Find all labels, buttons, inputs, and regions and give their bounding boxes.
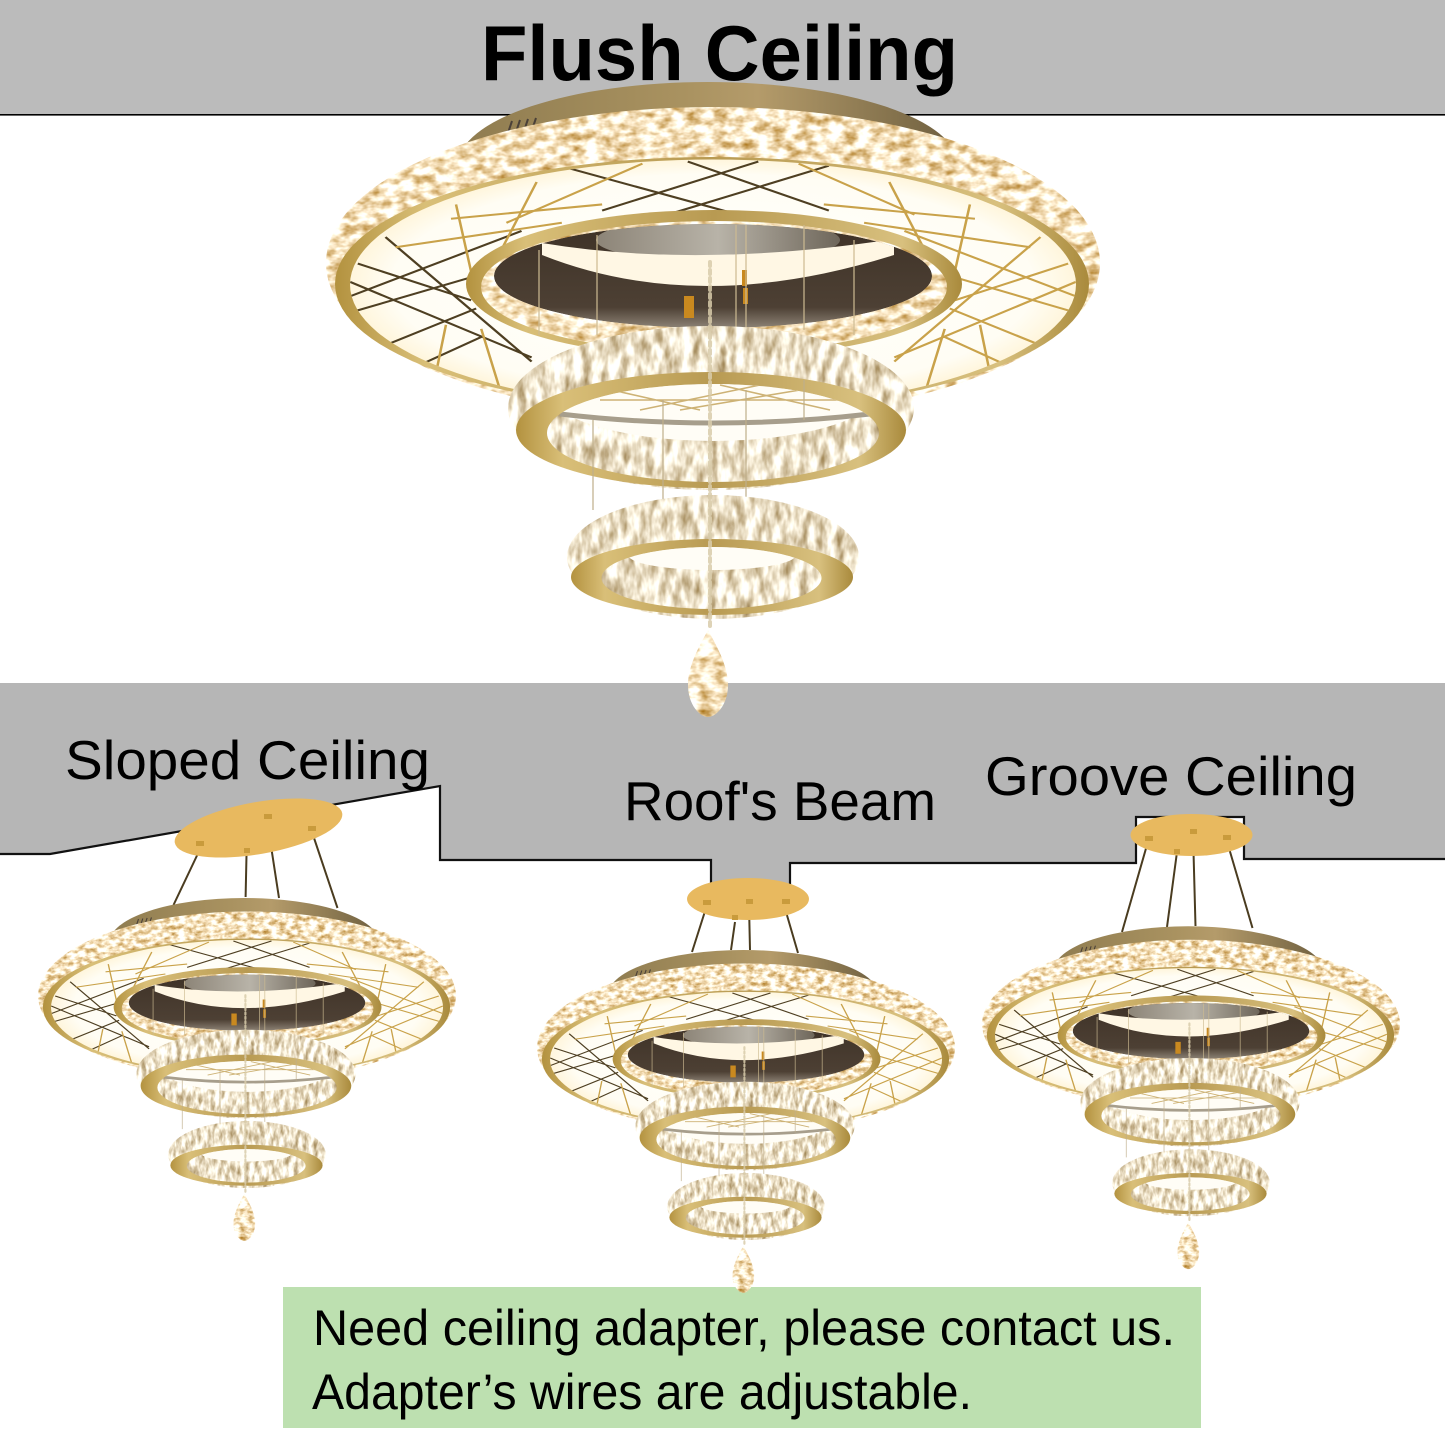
groove canopy screws <box>1145 829 1231 854</box>
dome vent slots <box>508 118 536 133</box>
second ring crystal band <box>481 221 947 353</box>
third ring gold rim <box>516 372 906 488</box>
third ring crystal band <box>508 326 914 490</box>
beam canopy wires <box>692 905 798 953</box>
sloped canopy plate <box>170 788 347 868</box>
flush ceiling band <box>0 0 1445 116</box>
mirror disc <box>596 218 840 262</box>
crystal pendant drop <box>688 630 728 717</box>
fourth ring inner crystal <box>602 547 822 609</box>
lower wires <box>593 380 804 510</box>
large ring opening <box>350 160 1076 410</box>
beam canopy screws <box>703 899 790 920</box>
groove pendant lamp <box>982 926 1400 1269</box>
roof's beam label: Roof's Beam <box>624 770 936 832</box>
groove ceiling chandelier <box>982 814 1400 1269</box>
adapter note line 2: Adapter’s wires are adjustable. <box>312 1364 972 1420</box>
large ring crystal band <box>326 107 1100 419</box>
sloped ceiling chandelier <box>38 788 456 1241</box>
beam pendant lamp <box>537 950 955 1293</box>
groove canopy plate <box>1130 814 1252 856</box>
sloped canopy screws <box>196 814 316 853</box>
sloped canopy wires <box>174 820 338 908</box>
lower ceiling band with slope, beam and groove <box>0 683 1445 895</box>
third ring inner crystal <box>547 384 879 482</box>
roof's beam chandelier <box>537 878 955 1293</box>
sloped ceiling label: Sloped Ceiling <box>65 729 430 791</box>
hanging wires <box>539 225 854 335</box>
lattice wires <box>350 162 1076 394</box>
second ring gold rim <box>466 210 962 358</box>
groove canopy wires <box>1122 833 1252 932</box>
lit crystal crescent <box>542 239 894 286</box>
sloped pendant lamp <box>38 898 456 1241</box>
fourth ring crystal band <box>567 495 859 619</box>
view through third ring <box>541 329 885 441</box>
second ring dark interior <box>494 218 932 328</box>
groove ceiling label: Groove Ceiling <box>985 745 1357 807</box>
beam canopy plate <box>687 878 809 920</box>
title: Flush Ceiling <box>481 9 958 97</box>
large ring gold rim <box>335 157 1089 411</box>
adapter note line 1: Need ceiling adapter, please contact us. <box>313 1300 1175 1356</box>
fourth ring gold rim <box>571 539 853 615</box>
adapter note box <box>283 1287 1201 1428</box>
main flush mounted chandelier <box>326 82 1100 717</box>
dome canopy <box>458 82 958 248</box>
small gold fittings <box>684 270 748 318</box>
view through fourth ring <box>628 540 796 570</box>
beaded chain <box>708 262 712 630</box>
